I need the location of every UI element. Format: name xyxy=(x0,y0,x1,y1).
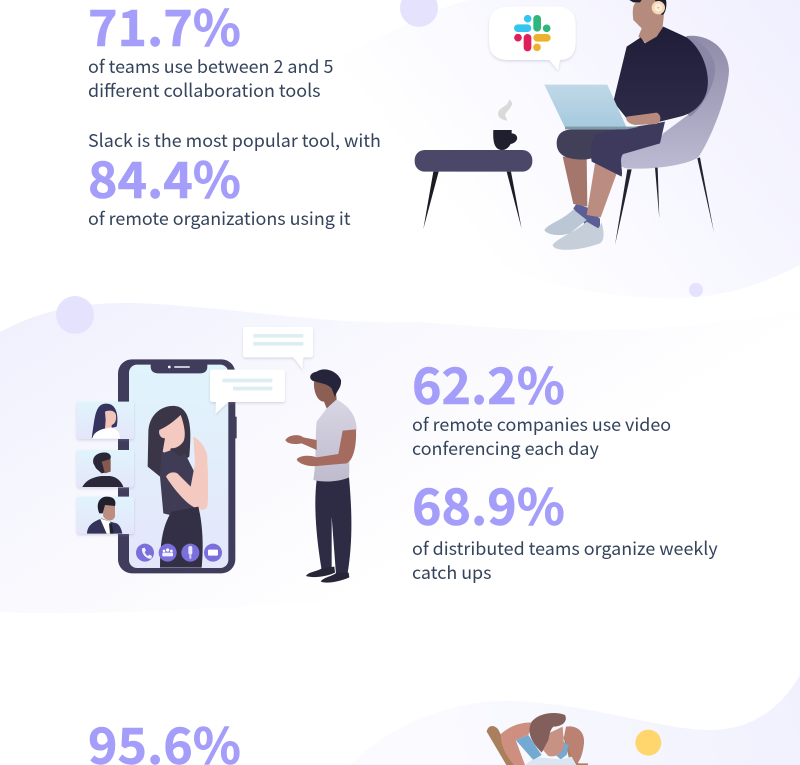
relaxing person xyxy=(501,713,584,765)
stat: 68.9%: of distributed teams organize weekly xyxy=(412,535,718,561)
chat bubble right xyxy=(243,327,313,369)
stat: 62.2% xyxy=(412,347,671,461)
laptop xyxy=(544,85,640,129)
phone xyxy=(118,359,237,573)
decorative circle middle xyxy=(56,296,94,334)
avatar card: man dark shirt xyxy=(77,450,134,487)
illustration: video call with phone xyxy=(77,327,357,583)
background blob: middle xyxy=(0,303,800,624)
stat: 68.9%: catch ups xyxy=(412,559,492,585)
avatar card: man in suit xyxy=(77,497,134,534)
coffee table xyxy=(415,150,532,229)
standing man xyxy=(285,369,357,583)
stat: 84.4% Slack: 84.4% xyxy=(88,141,241,213)
steam xyxy=(498,99,512,121)
stat: 71.7%: different collaboration tools xyxy=(88,77,321,103)
background blob: bottom right xyxy=(350,675,800,765)
deck chair frame xyxy=(487,726,518,765)
decorative circle top xyxy=(400,0,438,27)
illustration: man on chair with laptop xyxy=(415,0,729,250)
stat: 84.4% Slack: Slack is the most popular tool, with xyxy=(88,127,381,153)
avatar card: woman xyxy=(77,402,134,439)
man xyxy=(544,0,708,250)
stat: 71.7%: of teams use between 2 and 5 xyxy=(88,53,333,79)
stat: 62.2%: of remote companies use video xyxy=(412,411,671,437)
illustration: relaxing person with sun xyxy=(487,713,661,765)
coffee cup xyxy=(493,130,517,150)
chat bubble left xyxy=(210,370,285,414)
sun xyxy=(635,730,661,756)
stat: 84.4% Slack xyxy=(88,127,381,231)
stat: 68.9%: 68.9% xyxy=(412,468,565,540)
woman on screen xyxy=(148,406,208,568)
stat: 71.7% xyxy=(88,0,333,103)
call buttons xyxy=(136,544,222,562)
stat: 84.4% Slack: of remote organizations using it xyxy=(88,205,351,231)
stat: 62.2%: conferencing each day xyxy=(412,435,599,461)
chair xyxy=(615,36,729,245)
background blob: top right xyxy=(327,0,800,298)
icon: Slack speech bubble xyxy=(489,7,576,71)
stat: 68.9% xyxy=(412,468,718,585)
decorative circle right xyxy=(689,283,703,297)
stat: 62.2%: 62.2% xyxy=(412,347,565,419)
